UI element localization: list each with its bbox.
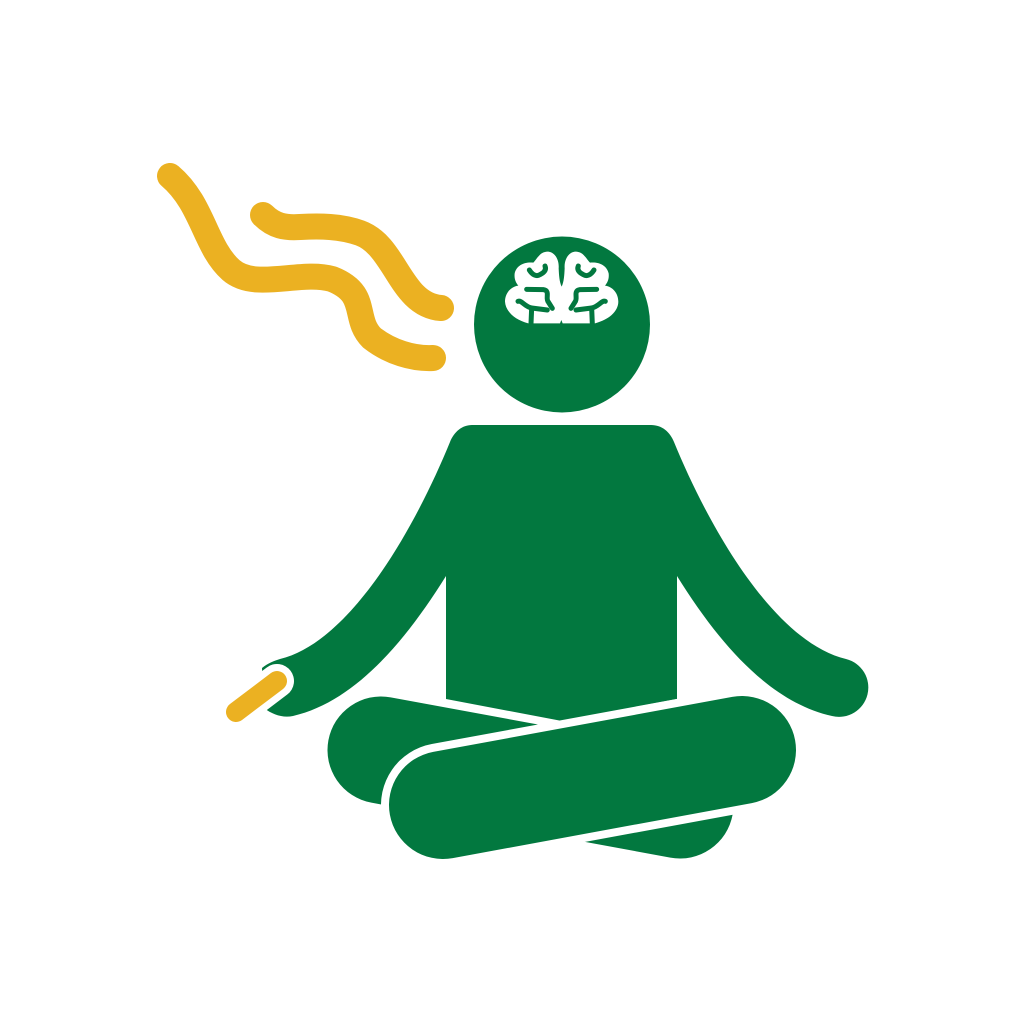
head [474, 236, 650, 412]
stick [236, 681, 277, 712]
head with brain [474, 236, 650, 412]
leg outline [443, 750, 742, 805]
icon: brain [505, 252, 618, 324]
icon: smoke wisps [170, 176, 441, 358]
icon: incense stick [236, 681, 277, 712]
torso and arms [262, 425, 868, 721]
stick outline [236, 681, 277, 712]
front leg [443, 750, 742, 805]
back leg [381, 750, 680, 805]
leg fill [443, 750, 742, 805]
